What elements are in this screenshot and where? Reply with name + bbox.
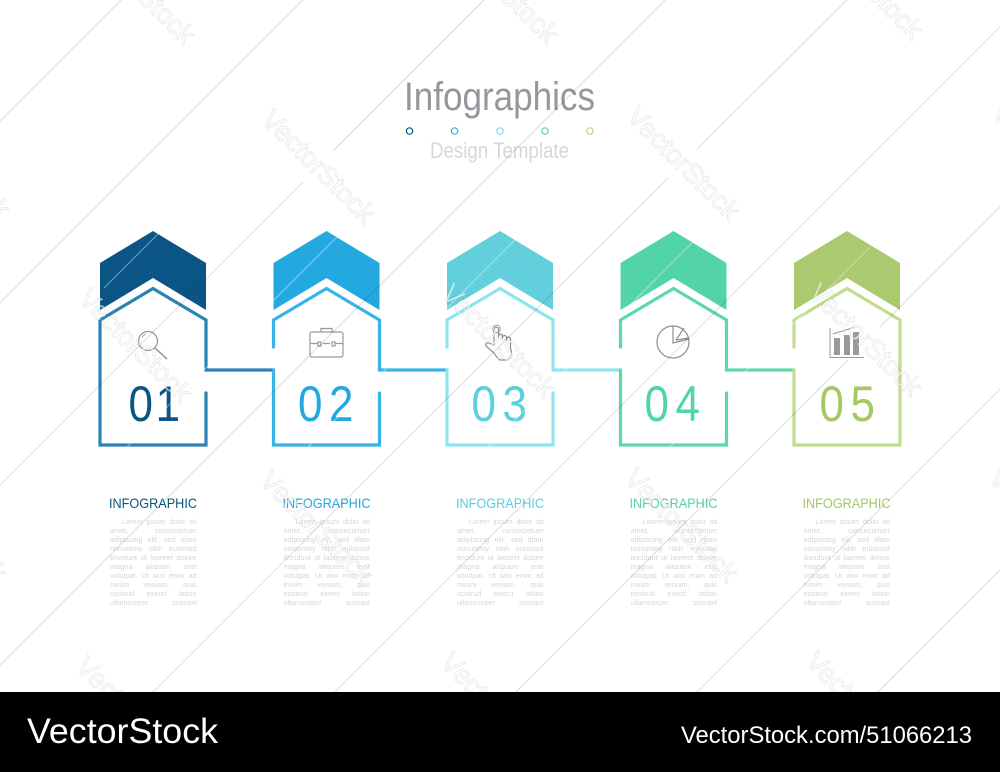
text block 04: amet, consectetuer (630, 526, 717, 534)
text block 01 (110, 516, 196, 606)
icon: briefcase (310, 328, 343, 357)
text block 05 (804, 516, 890, 606)
heading 03: INFOGRAPHIC (456, 495, 544, 511)
icon: magnifier (138, 332, 167, 359)
text block 02: nonummy nibh euismod (284, 544, 370, 552)
text block 05: tincidunt ut laoreet dolore (804, 552, 890, 562)
text block 04: ullamcorper suscipit (630, 598, 717, 606)
text block 01: amet, consectetuer (110, 526, 196, 534)
text block 03: volutpat. Ut wisi enim ad (457, 570, 544, 580)
text block 03 (457, 516, 544, 606)
text block 04: adipiscing elit, sed diam (630, 534, 717, 544)
heading 02: INFOGRAPHIC (282, 495, 370, 511)
house outline 05 (794, 288, 900, 445)
chevron 02 (274, 231, 380, 310)
text block 02: Lorem ipsum dolor sit (296, 516, 370, 526)
text block 02: volutpat. Ut wisi enim ad (284, 570, 370, 580)
house outline 03 with connector (447, 288, 620, 445)
heading 01: INFOGRAPHIC (109, 495, 197, 511)
watermarks: VectorStock (254, 465, 380, 590)
text block 05: volutpat. Ut wisi enim ad (804, 570, 890, 580)
number 01: 01 (128, 375, 183, 432)
text block 02: nostrud exerci tation (284, 588, 370, 598)
text block 04 (630, 516, 717, 606)
title: Infographics (404, 75, 595, 119)
text block 02: tincidunt ut laoreet dolore (284, 552, 370, 562)
watermarks: VectorStock (436, 278, 562, 403)
text block 02: magna aliquam erat (284, 562, 370, 570)
text block 05: magna aliquam erat (804, 562, 890, 570)
text block 02 (284, 516, 370, 606)
watermarks: VectorStock (621, 101, 747, 226)
text block 01: magna aliquam erat (110, 562, 196, 570)
footer url: VectorStock.com/51066213 (681, 722, 972, 749)
text block 03: Lorem ipsum dolor sit (469, 516, 544, 526)
chevron 04 (620, 231, 726, 310)
panel: step 05 (794, 231, 900, 511)
text block 02: ullamcorper suscipit (284, 598, 370, 606)
chevron 01 (100, 231, 206, 310)
panel: step 04 (620, 231, 794, 511)
text block 05: adipiscing elit, sed diam (804, 534, 890, 544)
text block 05: Lorem ipsum dolor sit (816, 516, 890, 526)
text block 05: minim veniam, quis (804, 580, 890, 588)
text block 04: tincidunt ut laoreet dolore (630, 552, 717, 562)
number 03: 03 (472, 375, 533, 432)
text block 01: adipiscing elit, sed diam (110, 534, 196, 544)
text block 04: magna aliquam erat (630, 562, 717, 570)
chevron 03 (447, 231, 553, 310)
text block 01: volutpat. Ut wisi enim ad (110, 570, 196, 580)
footer bar (0, 692, 1000, 772)
text block 01: Lorem ipsum dolor sit (122, 516, 196, 526)
text block 01: nonummy nibh euismod (110, 544, 196, 552)
icon: pie chart (657, 326, 689, 358)
heading 05: INFOGRAPHIC (802, 495, 890, 511)
watermarks: VectorStock (435, 647, 561, 772)
number 04: 04 (644, 375, 706, 432)
text block 01: tincidunt ut laoreet dolore (110, 552, 196, 562)
house outline 04 with connector (620, 288, 794, 445)
text block 03: nonummy nibh euismod (457, 544, 544, 552)
text block 03: amet, consectetuer (457, 526, 544, 534)
watermarks: VectorStock (256, 104, 382, 229)
text block 04: nonummy nibh euismod (630, 544, 717, 552)
icon: pointing hand (486, 325, 511, 360)
timeline dots (406, 128, 593, 134)
number 05: 05 (820, 375, 881, 432)
chevron 05 (794, 231, 900, 310)
text block 01: ullamcorper suscipit (110, 598, 196, 606)
text block 03: tincidunt ut laoreet dolore (457, 552, 544, 562)
text block 04: minim veniam, quis (630, 580, 717, 588)
watermarks: VectorStock (73, 283, 199, 408)
text block 01: nostrud exerci tation (110, 588, 196, 598)
icon: bar chart (830, 327, 864, 358)
number 02: 02 (298, 375, 360, 432)
watermarks: VectorStock (619, 463, 745, 588)
subtitle: Design Template (430, 138, 569, 163)
text block 03: adipiscing elit, sed diam (457, 534, 544, 544)
footer logo: VectorStock (27, 712, 219, 751)
text block 04: nostrud exerci tation (630, 588, 717, 598)
text block 05: amet, consectetuer (804, 526, 890, 534)
text block 05: ullamcorper suscipit (804, 598, 890, 606)
text block 04: volutpat. Ut wisi enim ad (630, 570, 717, 580)
text block 03: magna aliquam erat (457, 562, 544, 570)
text block 02: amet, consectetuer (284, 526, 370, 534)
text block 03: nostrud exerci tation (457, 588, 544, 598)
text block 03: ullamcorper suscipit (457, 598, 544, 606)
text block 04: Lorem ipsum dolor sit (642, 516, 717, 526)
text block 05: nonummy nibh euismod (804, 544, 890, 552)
house outline 02 with connector (274, 288, 447, 445)
watermarks: VectorStock (803, 277, 929, 402)
text block 02: adipiscing elit, sed diam (284, 534, 370, 544)
heading 04: INFOGRAPHIC (630, 495, 718, 511)
panel: step 02 (274, 231, 447, 511)
text block 03: minim veniam, quis (457, 580, 544, 588)
panel: step 03 (447, 231, 620, 511)
panel: step 01 (100, 231, 274, 511)
text block 05: nostrud exerci tation (804, 588, 890, 598)
house outline 01 with connector (100, 288, 274, 445)
text block 02: minim veniam, quis (284, 580, 370, 588)
text block 01: minim veniam, quis (110, 580, 196, 588)
watermarks: VectorStock (800, 646, 926, 771)
